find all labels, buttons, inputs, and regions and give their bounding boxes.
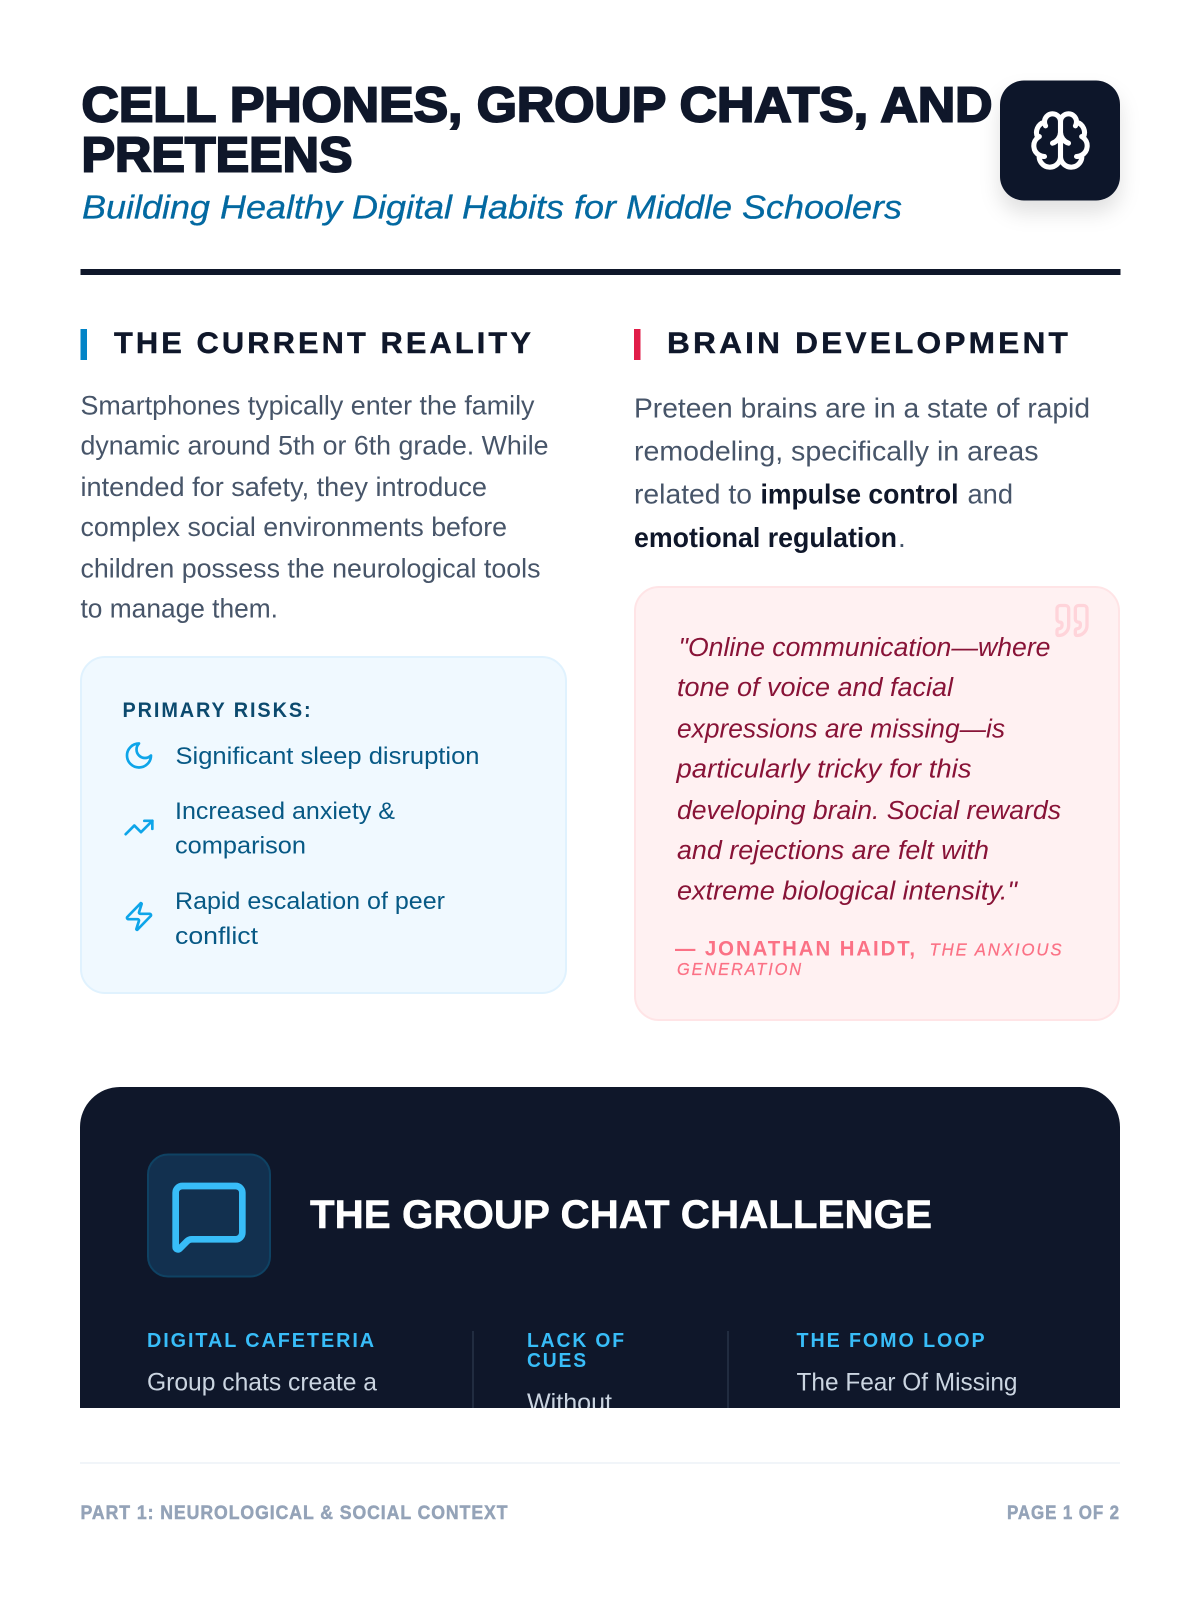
column: digital cafeteria: Group chats create a xyxy=(147,1368,377,1396)
text block: brain remodeling: and xyxy=(968,478,1013,510)
text block: brain remodeling xyxy=(634,392,1090,553)
quote attribution: THE ANXIOUS xyxy=(930,940,1064,960)
quote attribution xyxy=(675,938,1064,979)
quote attribution: GENERATION xyxy=(677,959,803,979)
text block: intro: to manage them. xyxy=(80,594,278,624)
icon: message bubble xyxy=(148,1154,270,1276)
header xyxy=(82,78,1120,226)
heading: the current reality: THE CURRENT REALITY xyxy=(114,327,534,360)
risk: peer conflict xyxy=(127,888,445,950)
text block: brain remodeling: . xyxy=(898,522,906,553)
text block: intro: children possess the neurological tools xyxy=(80,554,540,584)
risk: peer conflict: conflict xyxy=(175,923,258,950)
footer: part label: PART 1: NEUROLOGICAL & SOCIAL CONTEXT xyxy=(80,1503,508,1524)
risk: anxiety and comparison: comparison xyxy=(175,832,306,860)
text block: brain remodeling: Preteen brains are in a state of rapid xyxy=(634,392,1090,424)
heading: primary risks: PRIMARY RISKS: xyxy=(122,699,312,722)
title: CELL PHONES, GROUP CHATS, AND xyxy=(82,78,993,132)
quote text: and rejections are felt with xyxy=(677,837,989,865)
risk: anxiety and comparison xyxy=(126,798,395,860)
risk: peer conflict: Rapid escalation of peer xyxy=(175,888,445,915)
heading: group chat challenge: THE GROUP CHAT CHALLENGE xyxy=(310,1193,932,1237)
text block: intro: intended for safety, they introduce xyxy=(80,472,487,502)
column: the fomo loop xyxy=(796,1329,1018,1396)
icon: brain xyxy=(1000,80,1120,200)
column: lack of cues xyxy=(527,1333,624,1408)
quote text: developing brain. Social rewards xyxy=(677,797,1061,825)
text block: intro xyxy=(80,390,548,624)
column: digital cafeteria: DIGITAL CAFETERIA xyxy=(147,1329,376,1352)
quote text: tone of voice and facial xyxy=(677,674,954,702)
quote text: particularly tricky for this xyxy=(675,756,972,784)
footer: page number: PAGE 1 OF 2 xyxy=(1007,1503,1120,1524)
panel: the current reality xyxy=(80,327,566,993)
text block: brain remodeling: remodeling, specifically in areas xyxy=(634,436,1038,466)
column: the fomo loop: The Fear Of Missing xyxy=(796,1368,1018,1396)
footer xyxy=(80,1462,1120,1524)
heading: brain development: BRAIN DEVELOPMENT xyxy=(667,327,1071,360)
column: digital cafeteria xyxy=(147,1329,377,1396)
quote text: expressions are missing—is xyxy=(677,716,1005,744)
risk: sleep disruption: Significant sleep disruption xyxy=(176,743,480,770)
column: lack of cues: LACK OF xyxy=(527,1329,626,1352)
subtitle: Building Healthy Digital Habits for Middle Schoolers xyxy=(82,190,902,226)
title xyxy=(82,78,993,182)
quote text: extreme biological intensity." xyxy=(677,878,1018,906)
quote text xyxy=(675,634,1061,906)
text block: brain remodeling: related to xyxy=(634,478,752,510)
text block: intro: complex social environments before xyxy=(80,512,507,542)
text block: intro: dynamic around 5th or 6th grade. While xyxy=(80,430,548,460)
risk: anxiety and comparison: Increased anxiety & xyxy=(175,798,395,825)
icon: quote mark xyxy=(1057,606,1087,636)
quote text: "Online communication—where xyxy=(678,634,1050,662)
panel: quote xyxy=(635,587,1119,1020)
column: the fomo loop: THE FOMO LOOP xyxy=(796,1329,986,1352)
title: PRETEENS xyxy=(82,128,352,182)
quote attribution: — JONATHAN HAIDT, xyxy=(675,938,917,960)
panel: primary risks xyxy=(81,657,566,993)
column: lack of cues: CUES xyxy=(527,1349,588,1372)
panel: the group chat challenge xyxy=(80,1087,1120,1417)
text block: brain remodeling: impulse control xyxy=(760,478,958,510)
text block: intro: Smartphones typically enter the family xyxy=(80,390,535,420)
panel: brain development xyxy=(634,327,1119,1020)
text block: brain remodeling: emotional regulation xyxy=(634,522,897,553)
column: lack of cues: Without xyxy=(527,1389,612,1417)
